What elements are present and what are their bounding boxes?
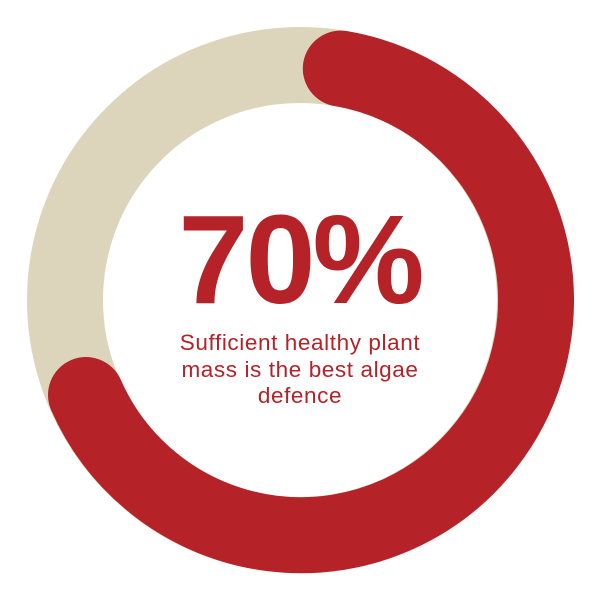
value arc 70% — [86, 69, 536, 535]
caption: mass is the best algae — [181, 356, 419, 382]
caption — [180, 330, 420, 408]
background ring — [65, 65, 535, 535]
percentage value: 70% — [178, 189, 422, 330]
caption: Sufficient healthy plant — [180, 330, 420, 355]
caption: defence — [258, 383, 342, 408]
